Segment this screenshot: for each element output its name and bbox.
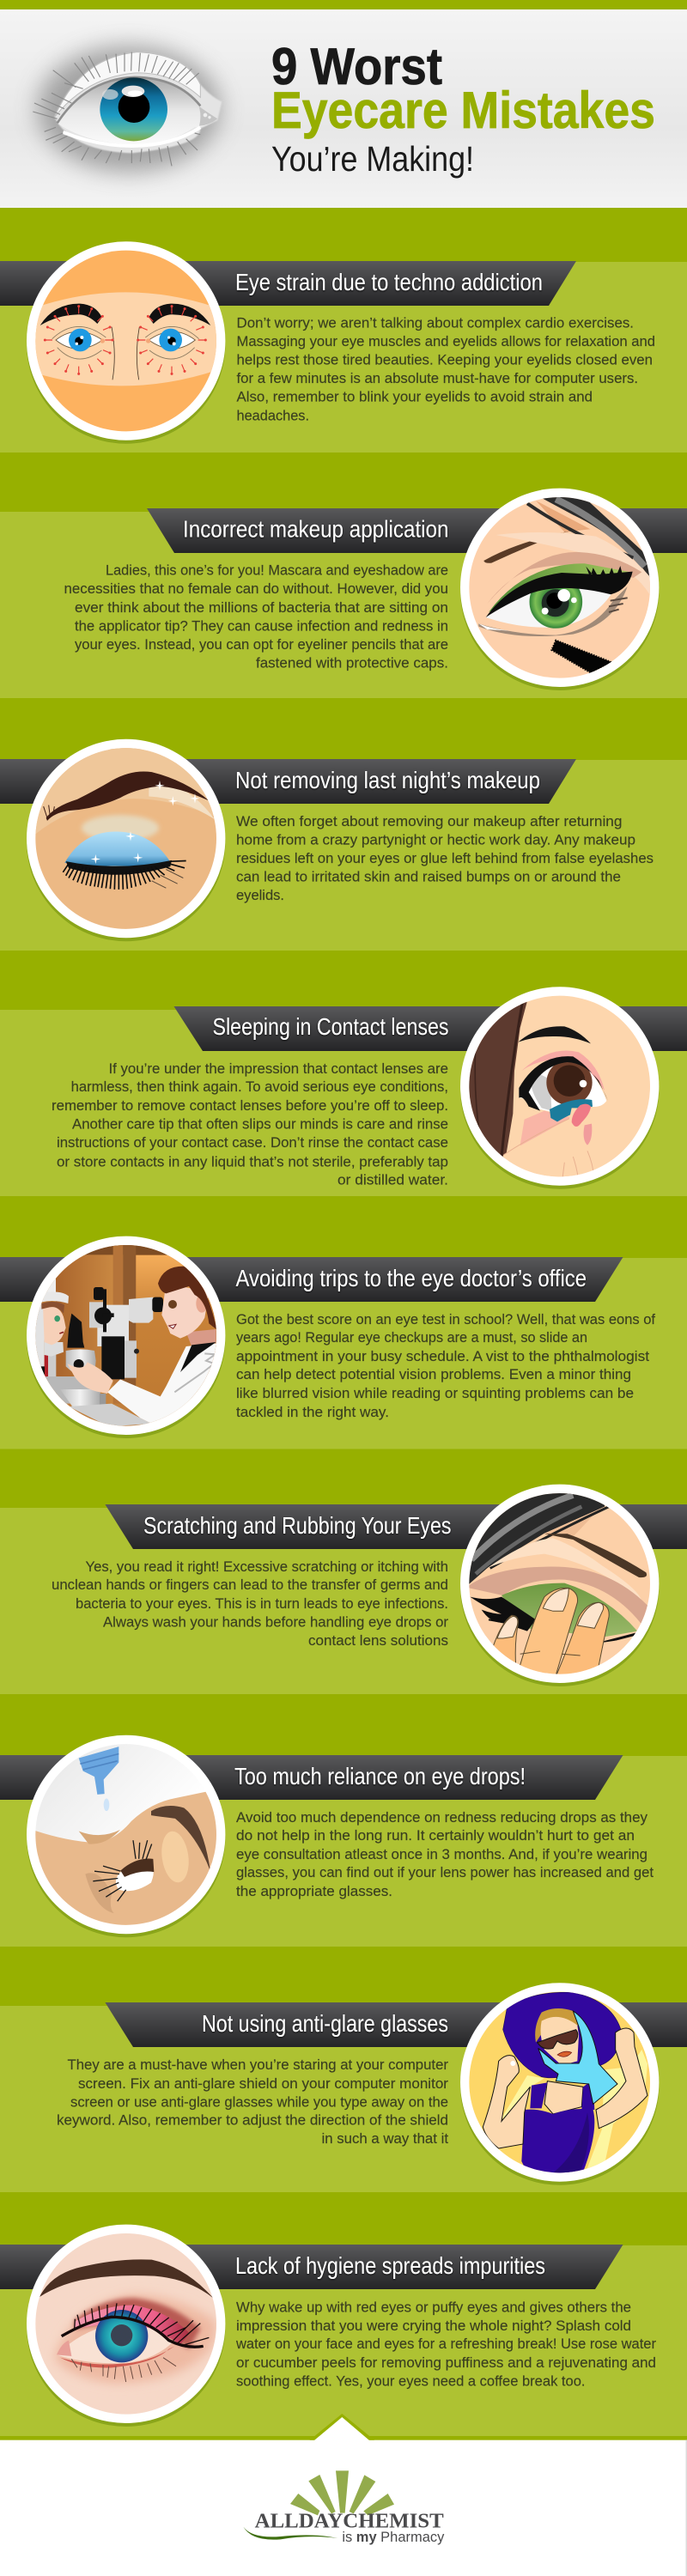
heading: Not using anti-glare glasses bbox=[202, 2010, 448, 2037]
icon: fingers rubbing eye bbox=[459, 1482, 662, 1686]
banner bbox=[0, 261, 576, 306]
body text: Avoid too much dependence on redness reducing drops as they bbox=[236, 1809, 647, 1826]
icon: closed eye with blue shadow bbox=[26, 738, 226, 941]
body text: glasses, you can find out if your lens power has increased and get bbox=[236, 1864, 654, 1880]
title bbox=[271, 38, 655, 179]
body text bbox=[237, 314, 655, 423]
body text: eyelids. bbox=[236, 887, 284, 903]
body text: headaches. bbox=[237, 407, 309, 423]
banner bbox=[0, 1755, 623, 1800]
body text: or distilled water. bbox=[337, 1171, 448, 1188]
body text: or store contacts in any liquid that’s not sterile, preferably tap bbox=[57, 1153, 448, 1170]
body text: in such a way that it bbox=[321, 2130, 448, 2147]
body text bbox=[64, 562, 448, 671]
panel: not removing makeup bbox=[0, 738, 687, 951]
body text: instructions of your contact case. Don’t rinse the contact case bbox=[57, 1134, 448, 1151]
body text: Yes, you read it right! Excessive scratching or itching with bbox=[86, 1558, 448, 1575]
heading: Sleeping in Contact lenses bbox=[213, 1013, 448, 1040]
body text: fastened with protective caps. bbox=[256, 654, 448, 671]
body text: keyword. Also, remember to adjust the direction of the shield bbox=[57, 2112, 448, 2129]
body text: home from a crazy partynight or hectic work day. Any makeup bbox=[236, 832, 635, 848]
banner bbox=[0, 1257, 623, 1302]
body text: water on your face and eyes for a refreshing break! Use rose water bbox=[235, 2336, 656, 2352]
body text: impression that you were crying the whole night? Splash cold bbox=[236, 2318, 631, 2334]
body text: the appropriate glasses. bbox=[236, 1883, 392, 1899]
panel: scratching and rubbing bbox=[0, 1482, 687, 1694]
panel: anti-glare glasses bbox=[0, 1981, 687, 2192]
icon: eye doctor examination bbox=[26, 1235, 232, 1438]
body text: Ladies, this one’s for you! Mascara and eyeshadow are bbox=[106, 562, 448, 579]
banner bbox=[173, 1006, 687, 1051]
body text: do not help in the long run. It certainly wouldn’t hurt to get an bbox=[236, 1827, 635, 1844]
body text: Massaging your eye muscles and eyelids allows for relaxation and bbox=[237, 333, 655, 349]
panel: header bbox=[0, 9, 687, 208]
icon: strained eyes bbox=[26, 240, 226, 444]
logo bbox=[243, 2470, 445, 2545]
heading: Too much reliance on eye drops! bbox=[234, 1763, 526, 1789]
body text: necessities that no female can do without. However, did you bbox=[64, 580, 448, 597]
icon: woman with hat and sunglasses bbox=[459, 1981, 662, 2185]
body text bbox=[236, 1809, 654, 1899]
logo: is my Pharmacy bbox=[342, 2529, 445, 2545]
body text: screen. Fix an anti-glare shield on your computer monitor bbox=[78, 2075, 448, 2092]
body text: Always wash your hands before handling eye drops or bbox=[103, 1613, 448, 1630]
body text: screen or use anti-glare glasses while you type away on the bbox=[70, 2094, 448, 2111]
body text: unclean hands or fingers can lead to the transfer of germs and bbox=[52, 1577, 448, 1593]
body text: We often forget about removing our makeup after returning bbox=[236, 813, 622, 829]
body text: can help detect potential vision problems. Even a minor thing bbox=[236, 1366, 631, 1382]
body text: or cucumber peels for removing puffiness and a rejuvenating and bbox=[236, 2354, 656, 2371]
heading: Incorrect makeup application bbox=[183, 516, 448, 543]
body text bbox=[236, 1311, 655, 1420]
body text: eye consultation atleast once in 3 months. And, if you’re wearing bbox=[236, 1846, 647, 1862]
body text: years ago! Regular eye checkups are a must, so slide an bbox=[236, 1329, 587, 1346]
body text bbox=[236, 813, 654, 903]
arrow notch bbox=[310, 2414, 374, 2440]
heading: Lack of hygiene spreads impurities bbox=[235, 2252, 545, 2279]
body text: harmless, then think again. To avoid serious eye conditions, bbox=[71, 1078, 448, 1095]
body text: tackled in the right way. bbox=[236, 1404, 389, 1420]
body text: They are a must-have when you’re staring at your computer bbox=[67, 2057, 448, 2073]
heading: Not removing last night’s makeup bbox=[235, 767, 540, 793]
banner bbox=[0, 759, 576, 804]
body text: like blurred vision while reading or squinting problems can be bbox=[236, 1385, 634, 1401]
body text: contact lens solutions bbox=[308, 1632, 448, 1649]
panel: reliance on eye drops bbox=[0, 1734, 687, 1947]
body text: Why wake up with red eyes or puffy eyes and gives others the bbox=[236, 2299, 631, 2315]
panel: incorrect makeup bbox=[0, 486, 687, 698]
banner bbox=[0, 2245, 623, 2289]
body text bbox=[57, 2057, 448, 2147]
banner bbox=[105, 2002, 687, 2047]
body text: bacteria to your eyes. This is in turn leads to eye infections. bbox=[76, 1595, 448, 1612]
panel: footer bbox=[0, 2414, 687, 2576]
heading: Avoiding trips to the eye doctor’s office bbox=[235, 1265, 587, 1291]
body text: your eyes. Instead, you can opt for eyeliner pencils that are bbox=[75, 636, 448, 653]
title: You’re Making! bbox=[271, 139, 474, 179]
body text: residues left on your eyes or glue left behind from false eyelashes bbox=[236, 850, 654, 866]
body text: soothing effect. Yes, your eyes need a coffee break too. bbox=[236, 2373, 586, 2390]
body text bbox=[235, 2299, 656, 2390]
body text: can lead to irritated skin and raised bumps on or around the bbox=[236, 868, 621, 884]
banner bbox=[105, 1504, 687, 1549]
body text: Also, remember to blink your eyelids to avoid strain and bbox=[237, 389, 593, 405]
icon: contact lens on finger bbox=[459, 985, 662, 1191]
panel: eye strain bbox=[0, 240, 687, 453]
panel: lack of hygiene bbox=[0, 2223, 687, 2436]
body text: Another care tip that often slips our minds is care and rinse bbox=[72, 1115, 448, 1132]
panel: avoiding eye doctor bbox=[0, 1235, 687, 1449]
icon: large eye bbox=[33, 46, 222, 172]
icon: eye drop bottle bbox=[26, 1734, 226, 1937]
icon: eye with pink shadow bbox=[26, 2223, 226, 2427]
body text: the applicator tip? They can cause infection and redness in bbox=[75, 617, 448, 634]
heading: Eye strain due to techno addiction bbox=[235, 269, 543, 295]
panel: sleeping in contact lenses bbox=[0, 985, 687, 1196]
body text: remember to remove contact lenses before you’re off to sleep. bbox=[52, 1097, 448, 1114]
title: 9 Worst bbox=[271, 38, 442, 95]
body text bbox=[52, 1060, 448, 1188]
logo: ALLDAYCHEMIST bbox=[255, 2509, 444, 2532]
banner bbox=[147, 508, 687, 553]
body text: ever think about the millions of bacteria that are sitting on bbox=[75, 599, 448, 616]
body text: If you’re under the impression that contact lenses are bbox=[108, 1060, 448, 1077]
icon: green eye makeup bbox=[459, 486, 662, 690]
body text: for a few minutes is an absolute must-have for computer users. bbox=[237, 370, 638, 386]
body text: Don’t worry; we aren’t talking about complex cardio exercises. bbox=[237, 314, 634, 331]
body text bbox=[52, 1558, 448, 1649]
body text: helps rest those tired beauties. Keeping your eyelids closed even bbox=[237, 352, 653, 368]
body text: appointment in your busy schedule. A vist to the phthalmologist bbox=[236, 1348, 649, 1364]
heading: Scratching and Rubbing Your Eyes bbox=[143, 1512, 452, 1539]
body text: Got the best score on an eye test in school? Well, that was eons of bbox=[236, 1311, 655, 1327]
